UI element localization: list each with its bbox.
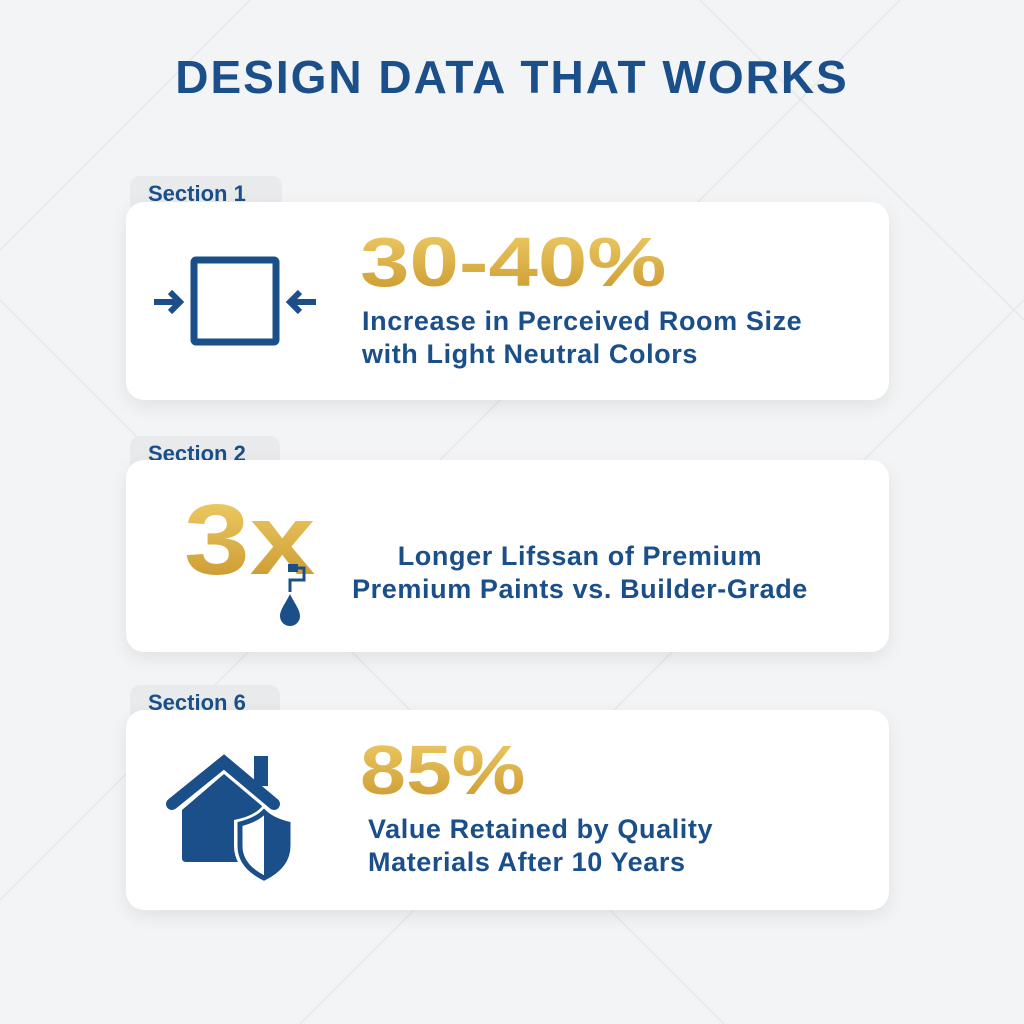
tab: section 6: Section 6 xyxy=(148,690,246,715)
tab: section 1: Section 1 xyxy=(148,181,246,206)
tab: section 2: Section 2 xyxy=(148,441,246,466)
title: DESIGN DATA THAT WORKS xyxy=(175,51,849,103)
panel: section 1 xyxy=(126,202,889,400)
icon: room size square xyxy=(154,256,316,346)
tab: section 2 xyxy=(130,436,280,476)
text block: Premium Paints vs. Builder-Grade xyxy=(352,574,808,604)
icon: paint roller drop xyxy=(280,564,306,626)
stat: 85%: 85% xyxy=(360,731,525,809)
text block xyxy=(362,306,802,369)
stat: 30-40%: 30-40% xyxy=(360,223,666,301)
text block: Value Retained by Quality xyxy=(368,814,713,844)
text block xyxy=(368,814,713,877)
text block: Longer Lifssan of Premium xyxy=(398,541,762,571)
panel: section 2 xyxy=(126,460,889,652)
text block: Materials After 10 Years xyxy=(368,847,686,877)
text block: Increase in Perceived Room Size xyxy=(362,306,802,336)
icon: house with shield xyxy=(166,754,290,881)
tab: section 6 xyxy=(130,685,280,725)
tab: section 1 xyxy=(130,176,282,216)
stat: 3x: 3x xyxy=(184,484,315,596)
text block: with Light Neutral Colors xyxy=(362,339,698,369)
text block xyxy=(352,541,808,604)
panel: section 6 xyxy=(126,710,889,910)
